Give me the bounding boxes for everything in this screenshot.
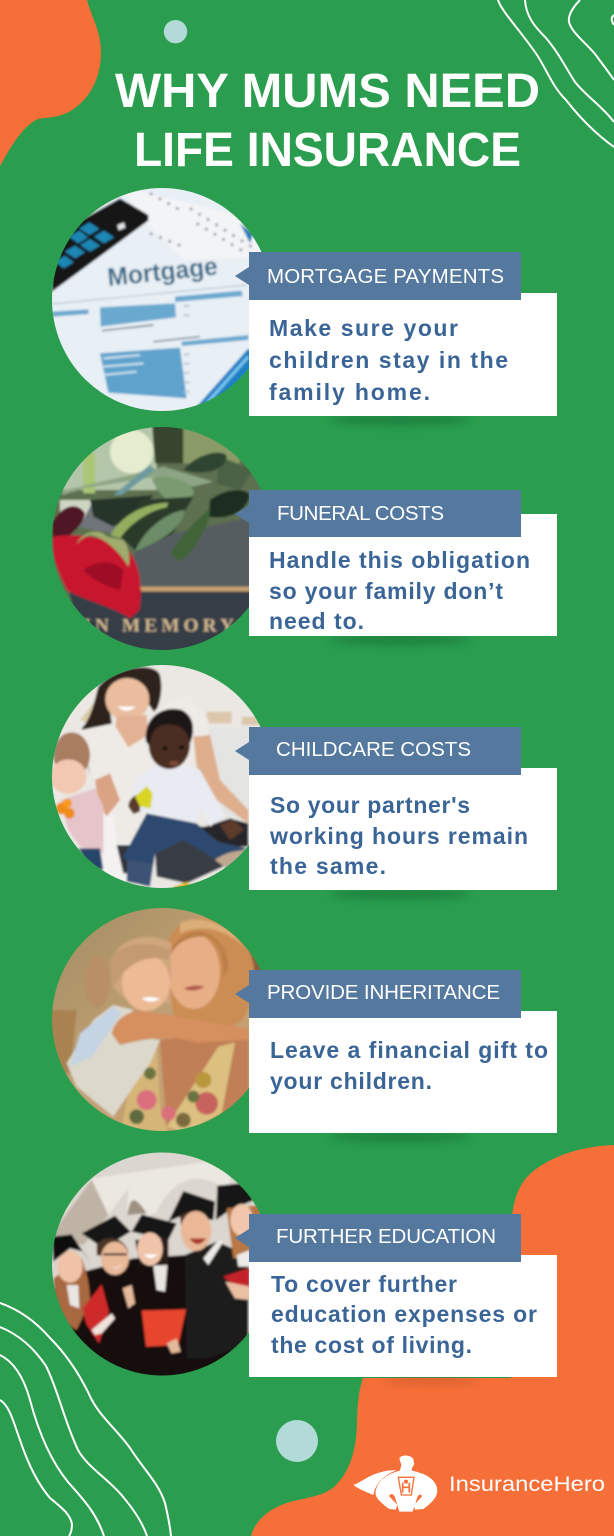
body: education bbox=[271, 1271, 537, 1358]
title bbox=[115, 65, 540, 177]
body: education: education expenses or bbox=[271, 1301, 537, 1327]
small dot top bbox=[164, 20, 187, 43]
item: mortgage payments bbox=[235, 252, 557, 425]
tag: childcare bbox=[235, 727, 521, 775]
orange blob bottom right bbox=[251, 1145, 614, 1536]
mortgage wordmark in photo: Mortgage bbox=[106, 253, 219, 292]
tag: funeral bbox=[235, 490, 521, 537]
photo: mother hugging daughter bbox=[52, 908, 260, 1131]
body: funeral: so your family don’t bbox=[269, 578, 503, 604]
large dot bottom bbox=[276, 1420, 318, 1462]
item: provide inheritance bbox=[235, 970, 557, 1142]
text panel: funeral bbox=[249, 514, 557, 636]
contour lines bottom left bbox=[0, 1303, 171, 1536]
heading: inheritance: PROVIDE INHERITANCE bbox=[267, 981, 500, 1004]
heading: childcare: CHILDCARE COSTS bbox=[276, 738, 471, 761]
text panel: mortgage bbox=[249, 293, 557, 416]
heading: funeral: FUNERAL COSTS bbox=[277, 502, 444, 525]
body: childcare: working hours remain bbox=[269, 823, 528, 849]
body: childcare bbox=[269, 792, 528, 879]
heading: education: FURTHER EDUCATION bbox=[276, 1225, 496, 1248]
body: mortgage: family home. bbox=[269, 379, 430, 405]
body: education: To cover further bbox=[271, 1271, 457, 1297]
tag: mortgage bbox=[235, 252, 521, 300]
title: WHY MUMS NEED bbox=[115, 65, 540, 118]
tag: education bbox=[235, 1214, 521, 1262]
icon: superhero logo bbox=[353, 1456, 437, 1512]
body: education: the cost of living. bbox=[271, 1332, 472, 1358]
body: funeral: Handle this obligation bbox=[269, 547, 530, 573]
body: inheritance bbox=[270, 1037, 548, 1094]
tag: inheritance bbox=[235, 970, 521, 1018]
item: childcare costs bbox=[235, 727, 557, 899]
photo: memorial roses bbox=[52, 427, 261, 650]
in memory plaque text: IN MEMORY bbox=[83, 615, 234, 636]
body: childcare: So your partner's bbox=[270, 792, 470, 818]
body: funeral bbox=[269, 547, 530, 634]
title: LIFE INSURANCE bbox=[134, 124, 521, 177]
contour lines top right bbox=[498, 0, 614, 147]
text panel: education bbox=[249, 1255, 557, 1377]
item: further education bbox=[235, 1214, 557, 1385]
body: mortgage: children stay in the bbox=[269, 347, 508, 373]
body: inheritance: your children. bbox=[270, 1068, 432, 1094]
body: inheritance: Leave a financial gift to bbox=[270, 1037, 548, 1063]
photo: mortgage document bbox=[52, 188, 262, 411]
text panel: inheritance bbox=[249, 1011, 557, 1133]
body: funeral: need to. bbox=[269, 608, 364, 634]
photo: mother with babies bbox=[52, 665, 260, 888]
photo: graduates bbox=[52, 1152, 260, 1376]
orange blob top left bbox=[0, 0, 101, 166]
logo wordmark: InsuranceHero bbox=[449, 1473, 605, 1496]
body: childcare: the same. bbox=[270, 853, 386, 879]
heading: mortgage: MORTGAGE PAYMENTS bbox=[267, 265, 504, 288]
item: funeral costs bbox=[235, 490, 557, 645]
body: mortgage bbox=[269, 315, 508, 405]
text panel: childcare bbox=[249, 768, 557, 890]
body: mortgage: Make sure your bbox=[269, 315, 458, 341]
